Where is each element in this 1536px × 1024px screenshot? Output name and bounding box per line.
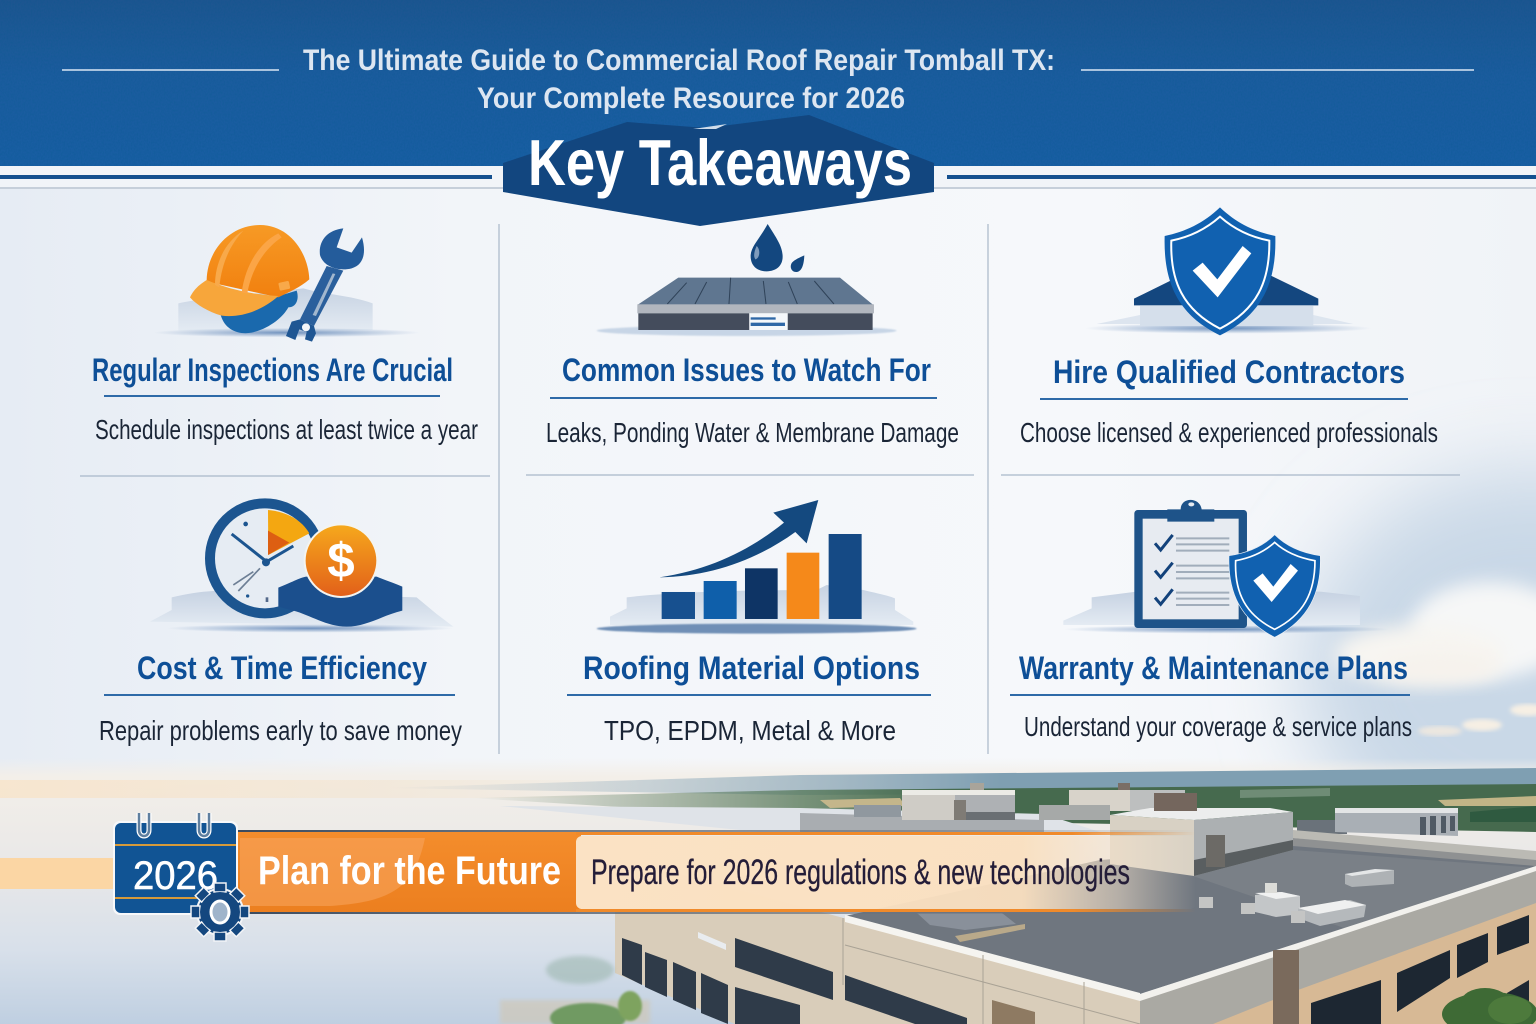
heading: Plan for the Future (258, 849, 561, 893)
penthouse (1110, 793, 1293, 876)
description: TPO, EPDM, Metal & More (604, 715, 896, 746)
underline (1010, 694, 1410, 696)
parapet white edge left (845, 915, 1140, 1001)
icon: hard hat and wrench (153, 225, 420, 342)
heading: Common Issues to Watch For (562, 352, 931, 388)
left accent bar (0, 858, 115, 889)
title: Your Complete Resource for 2026 (477, 82, 905, 115)
icon: clipboard and shield (1063, 500, 1390, 637)
panel: warranty and maintenance (1010, 500, 1412, 742)
orange band (236, 830, 1196, 833)
heading: Roofing Material Options (583, 650, 920, 686)
banner: plan for the future (236, 830, 1196, 914)
tree (1442, 988, 1536, 1024)
panel: common issues (546, 224, 959, 448)
heading: Cost & Time Efficiency (137, 650, 427, 686)
roof membrane (845, 846, 1536, 994)
grid dividers (80, 224, 1460, 754)
title: The Ultimate Guide to Commercial Roof Repair Tomball TX: (303, 44, 1055, 77)
cream panel (576, 832, 1196, 912)
icon: 2026 calendar with gear (113, 813, 249, 941)
panel: roofing materials (567, 500, 931, 746)
windows left wall (622, 938, 967, 1024)
panel: regular inspections (92, 225, 478, 445)
title (62, 44, 1474, 115)
left wall (615, 912, 1140, 1024)
icon: clock and coin (150, 503, 453, 633)
heading: Hire Qualified Contractors (1053, 354, 1405, 390)
description: Leaks, Ponding Water & Membrane Damage (546, 417, 959, 448)
underline (104, 395, 440, 397)
header background (0, 0, 1536, 168)
page background (1284, 448, 1536, 770)
icon: 2026 calendar with gear: 2026 (133, 854, 218, 898)
gear (191, 883, 249, 941)
icon: shield over roof (1085, 207, 1372, 335)
description: Prepare for 2026 regulations & new technologies (591, 853, 1130, 892)
header ribbon (0, 166, 1536, 189)
panel: hire contractors (1020, 207, 1438, 448)
panel: cost and time (99, 503, 462, 746)
underline (567, 694, 931, 696)
underline (104, 694, 455, 696)
heading: Warranty & Maintenance Plans (1019, 650, 1408, 686)
rear buildings (854, 783, 1536, 868)
underline (550, 397, 937, 399)
icon: clock and coin: $ (327, 533, 355, 588)
bottom photo scene: commercial roof (0, 758, 1536, 1024)
heading: Regular Inspections Are Crucial (92, 352, 453, 388)
banner: key takeaways (503, 115, 934, 226)
right wall (1213, 903, 1536, 1024)
description: Repair problems early to save money (99, 715, 462, 746)
icon: rising bar chart (597, 500, 917, 634)
underline (1040, 398, 1408, 400)
windows right wall (1311, 915, 1529, 1024)
horizon (380, 768, 1536, 832)
banner: key takeaways: Key Takeaways (528, 126, 912, 199)
description: Understand your coverage & service plans (1024, 711, 1412, 742)
icon: roof with water drops (597, 224, 897, 336)
description: Schedule inspections at least twice a year (95, 414, 478, 445)
left trees and fog (500, 956, 650, 1024)
rooftop units (917, 869, 1394, 942)
